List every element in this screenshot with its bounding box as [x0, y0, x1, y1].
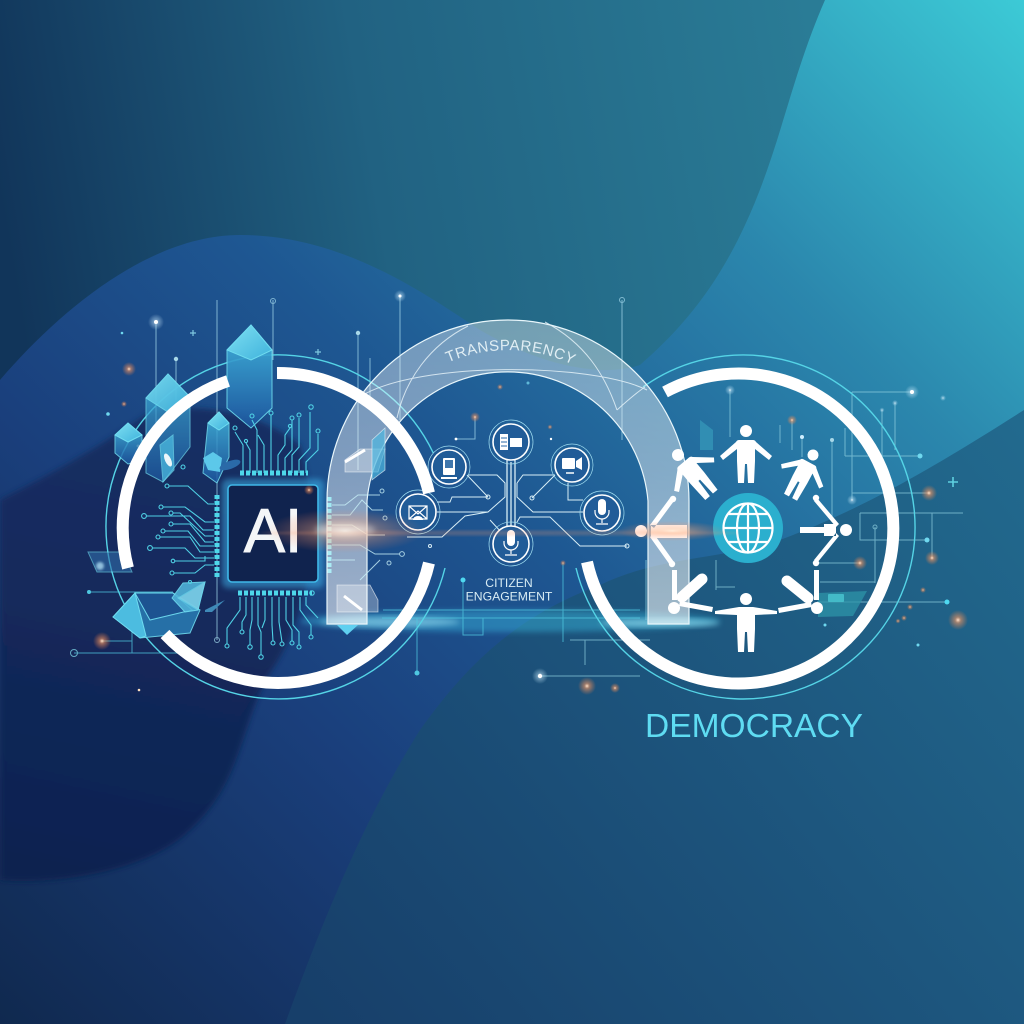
democracy hub backdrop — [576, 355, 915, 745]
icon: screens node — [489, 420, 533, 464]
crystal: bottom left slab — [113, 593, 200, 638]
light flares — [260, 509, 740, 553]
circuit traces seen through the arch — [332, 489, 404, 580]
arch band — [327, 320, 689, 624]
person: left — [635, 498, 687, 565]
label: citizen engagement: ENGAGEMENT — [466, 590, 553, 604]
person: right — [800, 498, 852, 563]
person: bottom right — [778, 570, 823, 614]
icon: video node — [551, 444, 593, 486]
globe disc — [713, 493, 783, 563]
crystal: left tall — [146, 374, 190, 482]
arch base diamond — [337, 625, 358, 635]
person: top right — [769, 439, 837, 508]
white ring segments: AI — [123, 373, 429, 683]
people ring — [635, 425, 852, 652]
label: citizen engagement: CITIZEN — [485, 576, 533, 590]
glass shapes on the arch — [337, 428, 385, 612]
chip pins — [217, 473, 329, 593]
guide path for curved label — [357, 350, 659, 501]
crystal: middle small — [203, 412, 242, 483]
crystal: cube — [172, 582, 225, 612]
icon: tablet node — [428, 446, 470, 488]
arch facet lines — [363, 322, 647, 418]
chip label: AI: AI — [244, 497, 302, 566]
white ring: democracy — [587, 374, 893, 684]
transparency arch — [326, 319, 690, 635]
decorative device panel — [700, 420, 867, 617]
circuit traces: bottom — [225, 591, 318, 659]
circuit traces: left — [142, 465, 214, 584]
person: bottom left — [668, 570, 713, 614]
circuit traces: top — [233, 405, 320, 473]
icon: globe — [724, 504, 772, 552]
AI hub — [88, 325, 445, 699]
background network lines: right — [540, 390, 963, 676]
label: democracy: DEMOCRACY — [645, 708, 863, 745]
icon: microphone node right — [580, 491, 624, 535]
background network lines: left and centre — [70, 296, 640, 673]
icon: microphone node bottom — [489, 522, 533, 566]
glow: horizontal light band under the arch — [300, 610, 720, 632]
outer thin ring: democracy — [576, 355, 915, 699]
citizen engagement network — [396, 420, 629, 604]
label: transparency (curved): TRANSPARENCY — [444, 340, 576, 363]
crystal: large top — [227, 325, 272, 428]
chip body — [228, 485, 318, 582]
person: top — [720, 425, 772, 483]
network traces — [407, 460, 629, 548]
chip glow — [222, 479, 324, 588]
crystals cluster — [88, 325, 272, 638]
crystal: small left — [115, 423, 142, 464]
crystal: left platform — [88, 552, 132, 572]
outer thin ring: AI — [106, 355, 445, 699]
person: top left — [654, 434, 731, 512]
decorative stars and light points — [87, 290, 968, 695]
person: bottom — [715, 593, 777, 652]
icon: envelope node — [396, 490, 440, 534]
